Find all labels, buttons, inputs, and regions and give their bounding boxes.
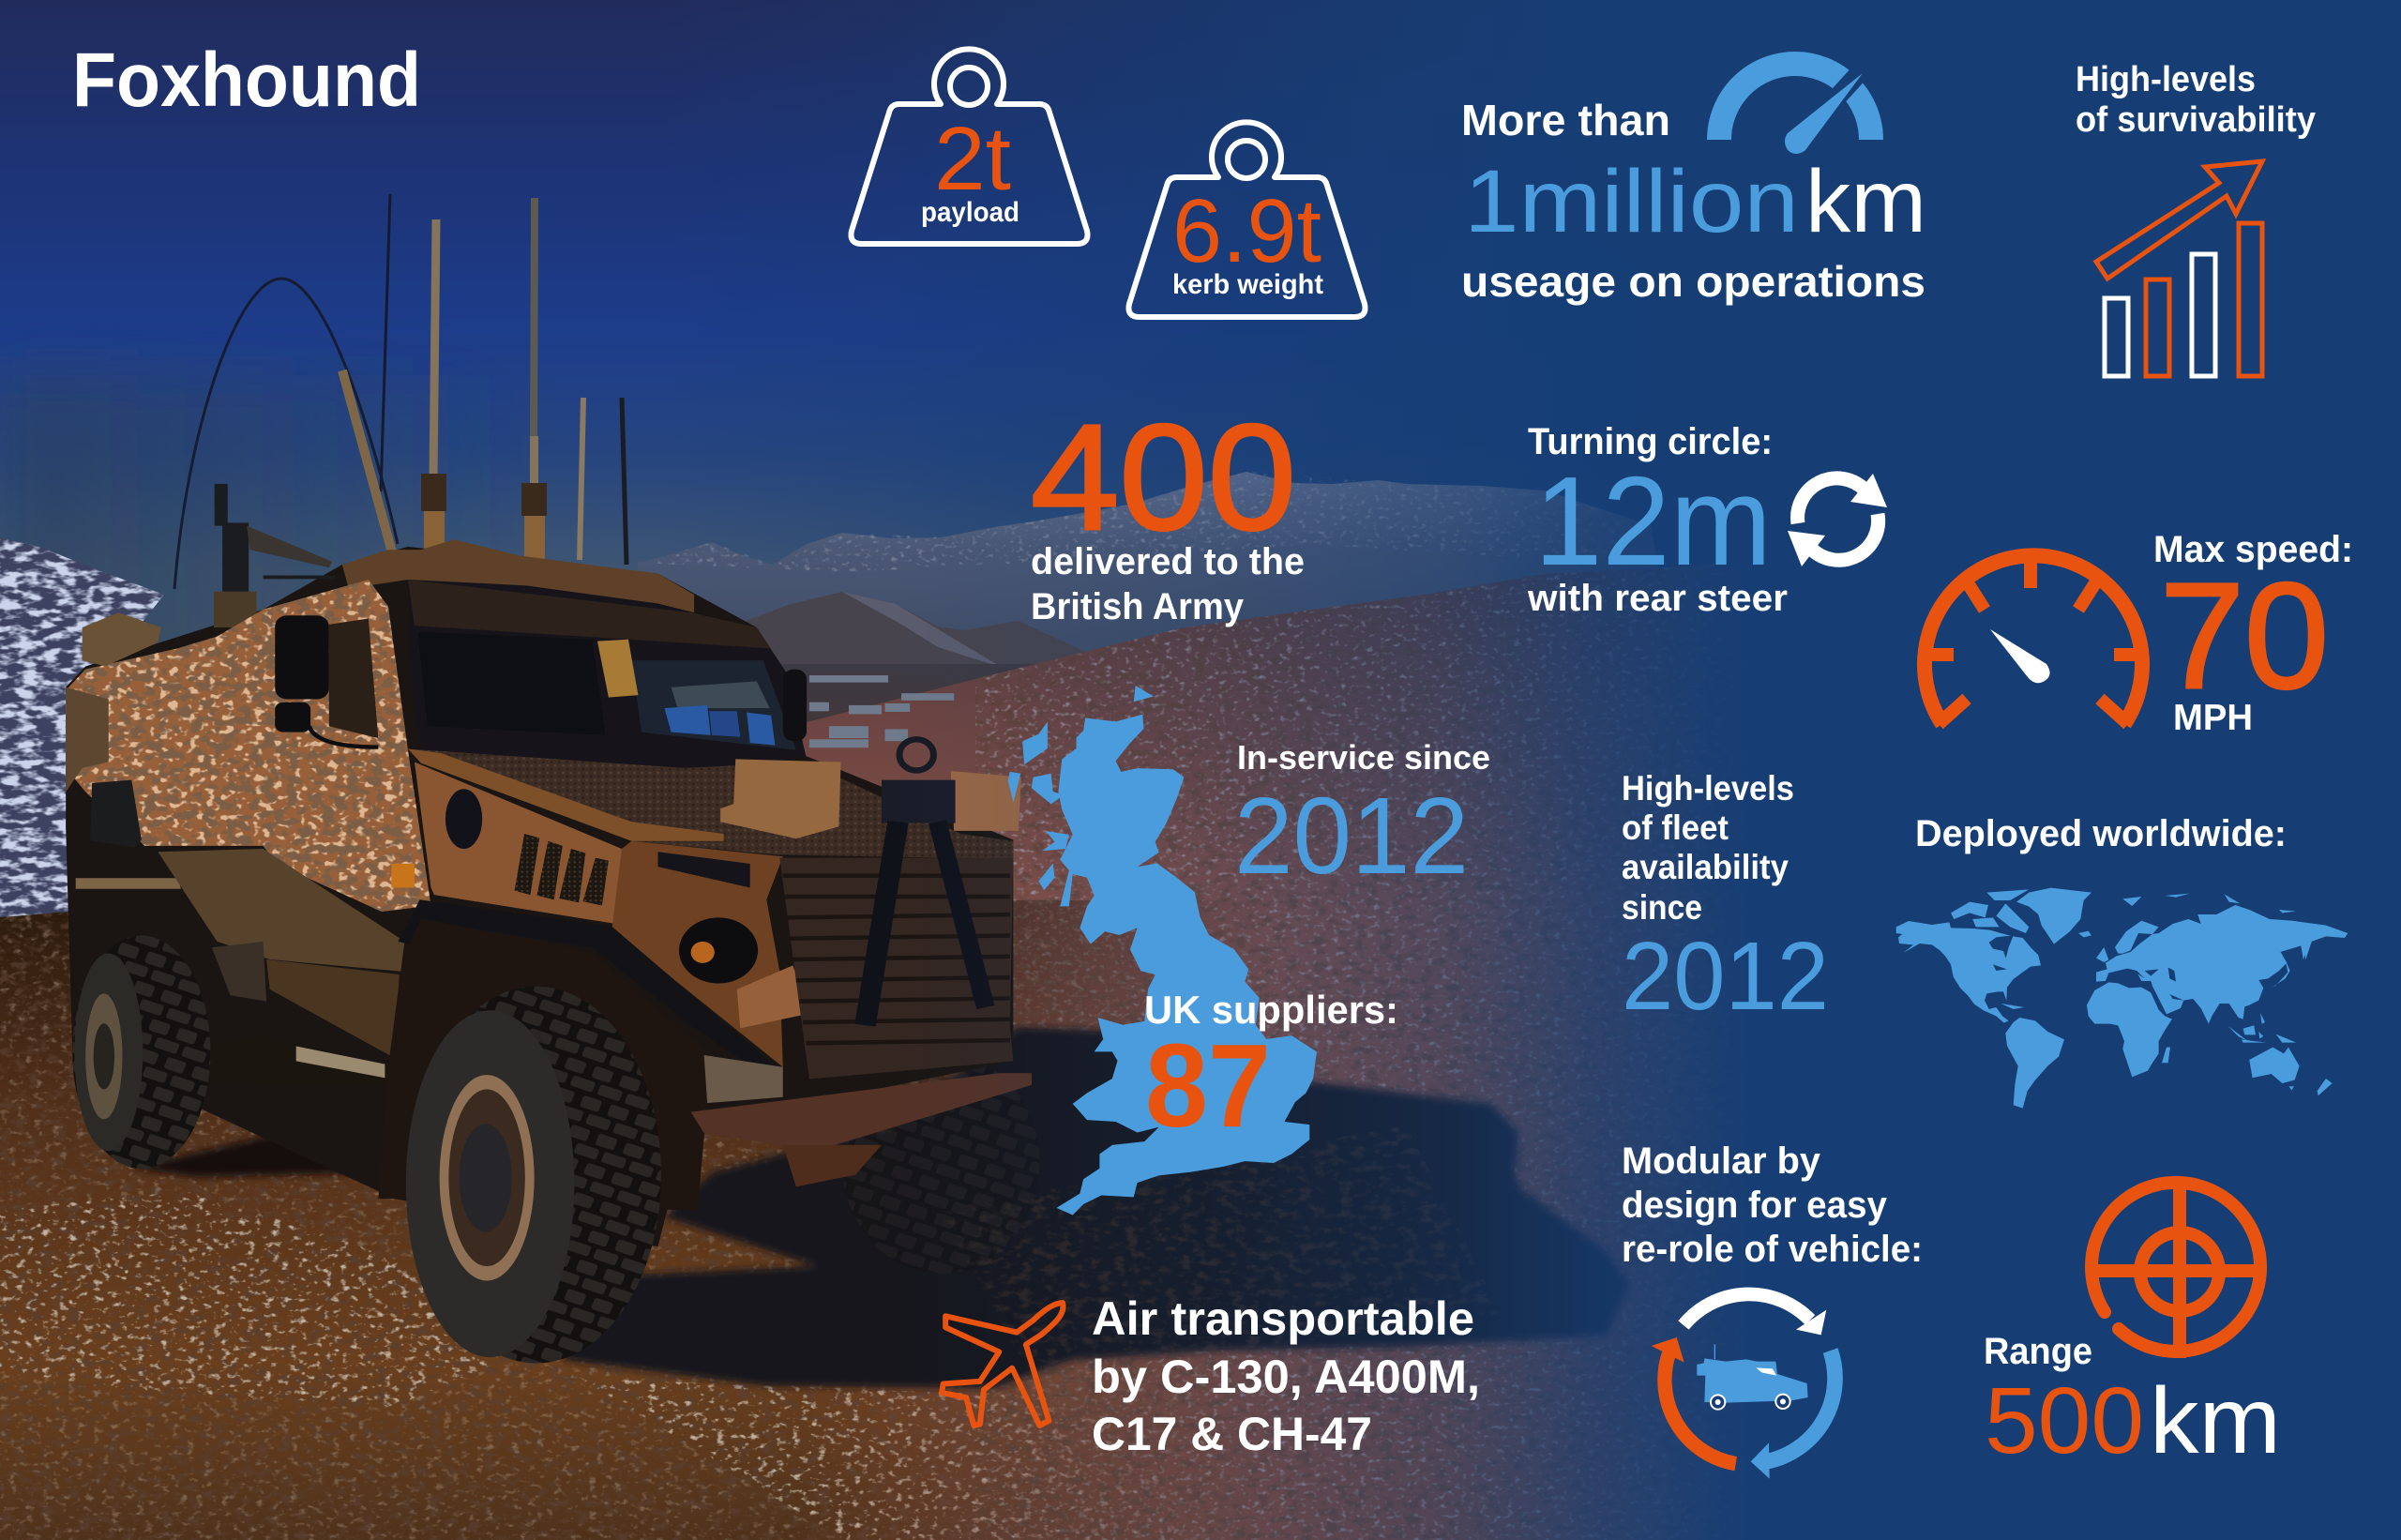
value: 2012 xyxy=(1234,775,1469,897)
weight icon: 6.9t kerb weight xyxy=(1128,122,1366,317)
icon: rising bar chart with arrow xyxy=(2096,161,2262,376)
icon: circular arrows xyxy=(1788,474,1887,566)
icon: plane outline xyxy=(942,1303,1064,1426)
heading line 3: re-role of vehicle: xyxy=(1622,1229,1923,1270)
stat: survivability xyxy=(2076,60,2316,376)
heading line 2: of fleet xyxy=(1622,808,1729,847)
front wheel xyxy=(406,987,661,1364)
rear wheel xyxy=(72,935,210,1169)
value: 2t xyxy=(934,109,1011,209)
heading line 1: High-levels xyxy=(1622,769,1794,808)
world map xyxy=(1896,888,2348,1109)
value: 2012 xyxy=(1622,922,1829,1030)
heading line 2: of survivability xyxy=(2076,100,2316,140)
heading: Max speed: xyxy=(2153,529,2353,570)
icon: gauge needle xyxy=(1990,629,2050,683)
unit: km xyxy=(1805,152,1926,251)
value: 1million xyxy=(1464,152,1799,251)
hood xyxy=(408,748,1021,859)
heading: Range xyxy=(1984,1331,2092,1372)
caption: with rear steer xyxy=(1527,578,1788,619)
value: 6.9t xyxy=(1172,181,1321,281)
stat: deployed worldwide xyxy=(1896,813,2348,1109)
weight icon: 2t payload xyxy=(851,49,1088,244)
weight outline xyxy=(1128,122,1366,317)
valley buildings xyxy=(809,675,954,747)
text line 3: C17 & CH-47 xyxy=(1092,1408,1372,1460)
wheel arch xyxy=(378,899,777,1211)
stat: in service since 2012 xyxy=(1234,738,1490,897)
icon: orange speed gauge xyxy=(1925,553,2142,724)
background photo: sky, mountains and ground xyxy=(0,0,1713,1540)
stat: max speed xyxy=(1925,529,2353,738)
heading: High-levels xyxy=(2076,60,2256,99)
heading: Turning circle: xyxy=(1528,421,1773,462)
heading: Deployed worldwide: xyxy=(1915,813,2287,854)
icon: target crosshair xyxy=(2091,1183,2264,1358)
vehicle antennas xyxy=(174,194,627,604)
label: payload xyxy=(921,197,1019,228)
icon: blue speedometer xyxy=(1719,62,1871,154)
unit: km xyxy=(2150,1368,2281,1473)
stat: more than 1 million km xyxy=(1461,62,1926,306)
stat: UK suppliers xyxy=(1144,988,1398,1152)
value: 87 xyxy=(1145,1019,1271,1152)
heading line 2: design for easy xyxy=(1622,1185,1888,1226)
side panel with vents xyxy=(391,762,622,925)
cab roof and windows xyxy=(342,539,807,771)
mirror xyxy=(275,615,378,747)
heading line 1: Modular by xyxy=(1622,1140,1821,1182)
value: 70 xyxy=(2160,551,2329,719)
heading: UK suppliers: xyxy=(1144,988,1398,1032)
stat: turning circle xyxy=(1527,421,1887,619)
caption line 2: British Army xyxy=(1031,586,1245,627)
heading: In-service since xyxy=(1237,738,1490,777)
front grille and tow bars xyxy=(779,739,1013,1080)
heading: More than xyxy=(1461,96,1670,144)
stat: range xyxy=(1984,1183,2281,1473)
value: 500 xyxy=(1985,1368,2144,1473)
weight outline xyxy=(851,49,1088,244)
machine gun xyxy=(214,484,336,627)
underbody plates xyxy=(69,839,404,1086)
UK map xyxy=(1008,686,1317,1215)
caption line 1: delivered to the xyxy=(1031,541,1305,582)
vehicle silhouette base xyxy=(66,547,1013,1246)
text line 2: by C-130, A400M, xyxy=(1092,1351,1480,1403)
value: 12m xyxy=(1534,450,1772,592)
stat: air transportable xyxy=(942,1292,1480,1460)
front bumper xyxy=(691,1055,1032,1186)
value: 400 xyxy=(1031,393,1296,561)
Foxhound vehicle xyxy=(66,484,1039,1364)
title: Foxhound xyxy=(72,38,421,123)
stat: modular design xyxy=(1622,1140,1923,1479)
front fender panel and headlight xyxy=(612,841,810,1067)
label: kerb weight xyxy=(1172,269,1323,300)
rear fittings xyxy=(66,612,161,876)
unit: MPH xyxy=(2173,698,2253,738)
heading line 3: availability xyxy=(1622,848,1789,886)
icon: re-role cycle with vehicle xyxy=(1652,1294,1835,1479)
stat: fleet availability xyxy=(1622,769,1829,1030)
text line 1: Air transportable xyxy=(1092,1292,1474,1345)
camouflage net on hull xyxy=(66,580,430,912)
far front wheel xyxy=(842,1052,1039,1274)
heading line 4: since xyxy=(1622,888,1702,927)
caption: useage on operations xyxy=(1461,257,1925,306)
stat: 400 delivered xyxy=(1031,393,1305,627)
